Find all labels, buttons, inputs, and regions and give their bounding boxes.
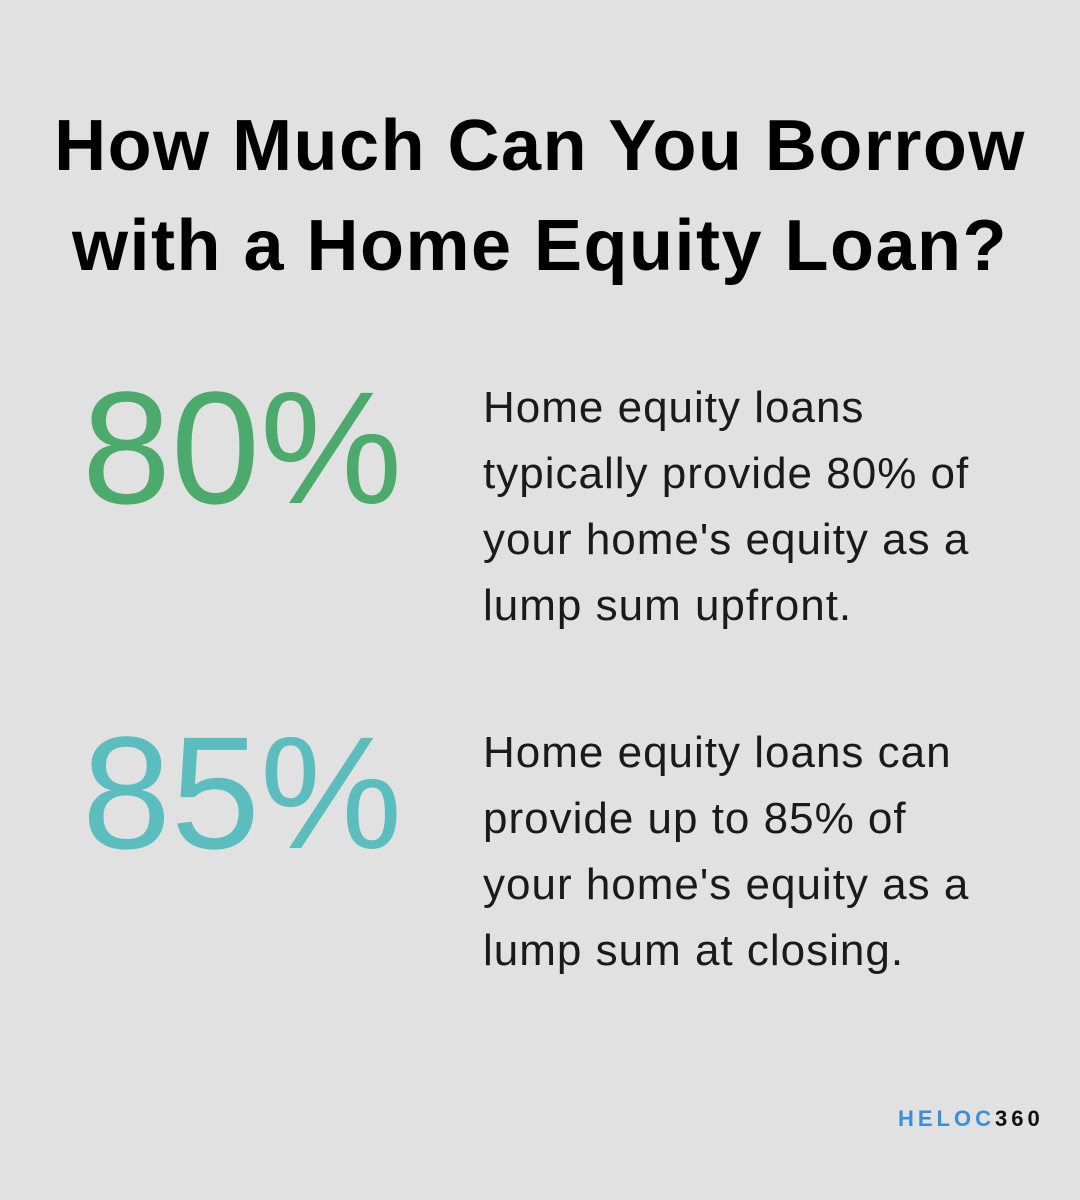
- text: 85% description: lump sum at closing.: [483, 926, 904, 975]
- text: 80% description: [483, 383, 969, 630]
- title: How Much Can You Borrow: [54, 106, 1026, 186]
- text: 85% description: your home's equity as a: [483, 860, 969, 909]
- text: 80% description: lump sum upfront.: [483, 581, 852, 630]
- text: 80% description: Home equity loans: [483, 383, 864, 432]
- title: [54, 106, 1026, 286]
- logo: HELOC360: [898, 1106, 1044, 1131]
- text: 85% description: Home equity loans can: [483, 728, 952, 777]
- title: with a Home Equity Loan?: [72, 206, 1008, 286]
- stat: 80%: 80%: [82, 358, 402, 537]
- text: 85% description: provide up to 85% of: [483, 794, 907, 843]
- text: 85% description: [483, 728, 969, 975]
- text: 80% description: your home's equity as a: [483, 515, 969, 564]
- text: 80% description: typically provide 80% of: [483, 449, 969, 498]
- stat: 85%: 85%: [82, 703, 402, 882]
